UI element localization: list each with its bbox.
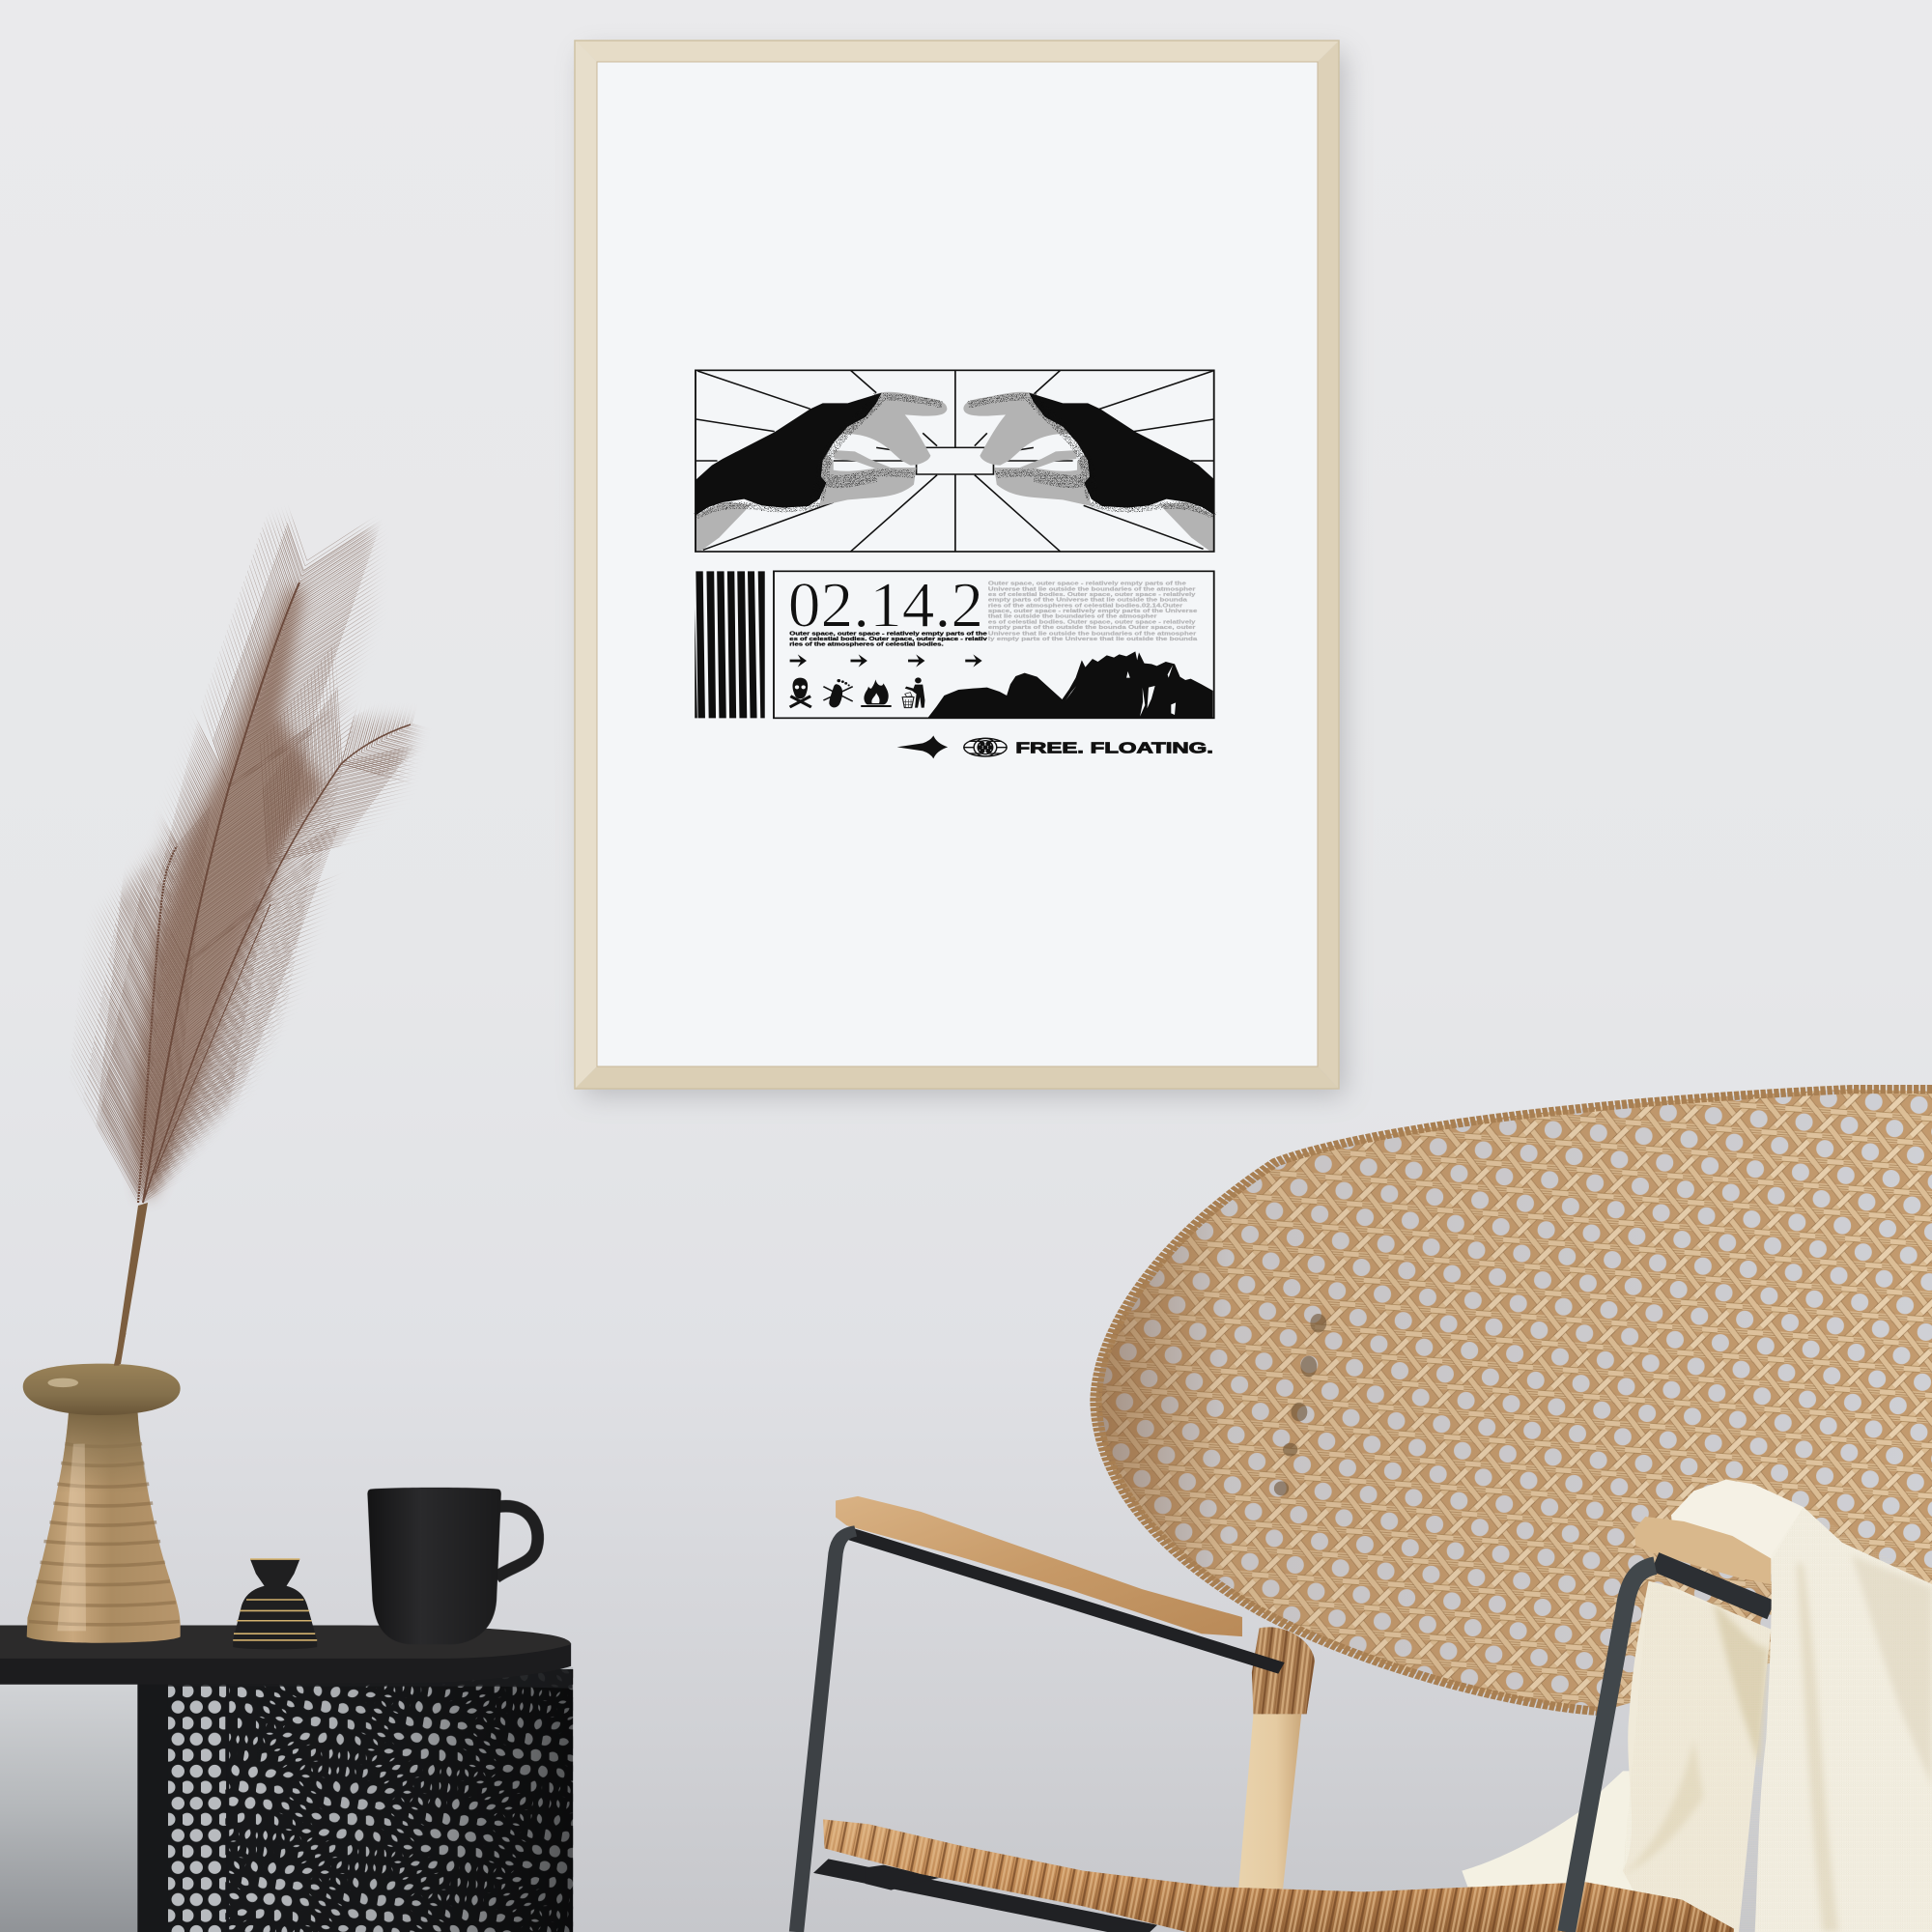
gold rings xyxy=(233,1559,317,1640)
pampas feather xyxy=(103,489,448,1364)
mesh right shade xyxy=(225,1669,573,1932)
mesh top band xyxy=(164,1669,572,1689)
arrows row xyxy=(790,654,982,668)
feather soft body xyxy=(131,588,325,1197)
poster artwork: lower info panel xyxy=(695,570,1214,718)
lower black rail xyxy=(821,1866,1150,1932)
seat wrapping strands xyxy=(823,1819,1734,1932)
feather spines xyxy=(138,582,411,1203)
blanket top hump xyxy=(1671,1480,1842,1577)
front left chair leg xyxy=(796,1531,856,1932)
seat rail xyxy=(821,1819,1734,1932)
table top surface xyxy=(0,1625,571,1659)
front right chair leg xyxy=(1567,1566,1655,1932)
perforated mesh sheet xyxy=(164,1669,573,1932)
blanket lower fold xyxy=(1462,1771,1655,1932)
post binding strands xyxy=(1252,1627,1315,1714)
right armrest wood xyxy=(1634,1517,1771,1584)
poster paper xyxy=(597,62,1318,1066)
chair back rim xyxy=(1095,1090,1932,1712)
black paragraph: ries of the atmospheres of celestial bodies. xyxy=(789,642,944,648)
vase cap highlight xyxy=(47,1378,78,1387)
grey paragraph: es of celestial bodies. Outer space, outer space - relatively xyxy=(988,620,1197,625)
icon: globe logo xyxy=(964,738,1007,756)
vase neck shadow xyxy=(57,1411,150,1493)
rattan chair xyxy=(836,1090,1932,1889)
black paragraph xyxy=(789,632,988,648)
vertical mesh seam xyxy=(226,1685,229,1932)
rail bracket xyxy=(866,1865,939,1890)
left armrest wood xyxy=(836,1496,1242,1636)
black paragraph: Outer space, outer space - relatively empty parts of the xyxy=(789,632,987,637)
blanket and right armrest xyxy=(1462,1480,1932,1932)
central rectangle xyxy=(917,447,993,474)
ceramic vase xyxy=(23,1333,181,1643)
grey paragraph: Universe that lie outside the boundaries of the atmospher xyxy=(988,632,1197,637)
black mug xyxy=(367,1488,538,1644)
vase body xyxy=(27,1409,181,1643)
icon: skull and crossbones xyxy=(790,678,811,707)
blanket shaded ribs xyxy=(1852,1555,1932,1787)
feather barbs xyxy=(103,489,448,1183)
right hand xyxy=(963,392,1214,551)
icon: crossed-out footprint xyxy=(823,679,853,707)
vase cap xyxy=(23,1364,181,1415)
grey paragraph: es of celestial bodies. Outer space, outer space - relatively xyxy=(988,592,1197,598)
blanket centre crease xyxy=(1797,1562,1838,1932)
blanket inner drape xyxy=(1623,1581,1771,1932)
grey paragraph: empty parts of the outside the bounda Outer space, outer xyxy=(988,625,1197,631)
poster artwork: hands panel xyxy=(696,370,1214,552)
blanket main fall xyxy=(1755,1507,1932,1932)
icon: four-point star arrow xyxy=(897,735,948,758)
hands panel border xyxy=(696,370,1214,552)
feather stem base xyxy=(114,1333,126,1366)
mountain silhouette xyxy=(928,651,1213,718)
grey paragraph xyxy=(988,582,1199,642)
icon: fire xyxy=(861,679,892,707)
vase glaze highlight xyxy=(57,1444,86,1631)
chair back see-through shade xyxy=(1095,1090,1932,1712)
mesh body backlight xyxy=(164,1667,573,1932)
bottle body xyxy=(233,1559,317,1649)
framed poster xyxy=(575,41,1345,1095)
dark slit holes xyxy=(1274,1314,1326,1495)
date heading: 02.14.2 xyxy=(788,570,983,640)
woven seat edge xyxy=(823,1819,1734,1932)
weave left shading xyxy=(1095,1109,1590,1710)
stipple grain xyxy=(696,396,943,516)
rear wooden post xyxy=(1238,1714,1301,1889)
mug handle xyxy=(496,1506,538,1577)
small gold-striped bottle xyxy=(233,1559,317,1649)
under-table wall shade xyxy=(0,1681,141,1932)
grey paragraph: Outer space, outer space - relatively empty parts of the xyxy=(988,582,1186,587)
mug body xyxy=(367,1488,501,1644)
blanket knit texture xyxy=(1623,1507,1932,1932)
left hand xyxy=(696,392,947,551)
table leg xyxy=(137,1658,168,1932)
rear mesh moire sheet xyxy=(225,1669,573,1932)
ray lines xyxy=(696,370,1214,552)
grey paragraph: ly empty parts of the Universe that lie outside the bounda xyxy=(988,637,1199,642)
side table xyxy=(0,1625,573,1932)
right arm black rail xyxy=(1655,1562,1771,1610)
vase rings xyxy=(29,1444,180,1625)
table top front edge xyxy=(0,1643,571,1685)
black paragraph: es of celestial bodies. Outer space, outer space - relativ xyxy=(789,637,988,642)
feather stem xyxy=(115,1203,148,1364)
wooden frame xyxy=(575,41,1339,1089)
grey paragraph: that lie outside the boundaries of the atmospher xyxy=(988,614,1158,620)
grey paragraph: ries of the atmospheres of celestial bodies.02.14.Outer xyxy=(988,604,1183,609)
barcode stripes xyxy=(695,571,765,718)
left arm black rail xyxy=(847,1533,1282,1668)
grey paragraph: Universe that lie outside the boundaries of the atmospher xyxy=(988,587,1197,592)
post binding xyxy=(1252,1627,1315,1714)
brand text: FREE. FLOATING. xyxy=(1015,739,1213,756)
poster artwork: footer brand line xyxy=(897,735,1213,758)
chair back cane weave xyxy=(1095,1090,1932,1712)
grey paragraph: empty parts of the Universe that lie outside the bounda xyxy=(988,598,1188,604)
blanket lower crease xyxy=(1623,1739,1703,1874)
grey paragraph: space, outer space - relatively empty parts of the Universe xyxy=(988,609,1197,614)
blanket inner fold shadow xyxy=(1713,1601,1768,1768)
info box border xyxy=(774,571,1214,718)
frame shadow xyxy=(583,52,1345,1095)
icon: person with trash bin xyxy=(902,677,924,708)
